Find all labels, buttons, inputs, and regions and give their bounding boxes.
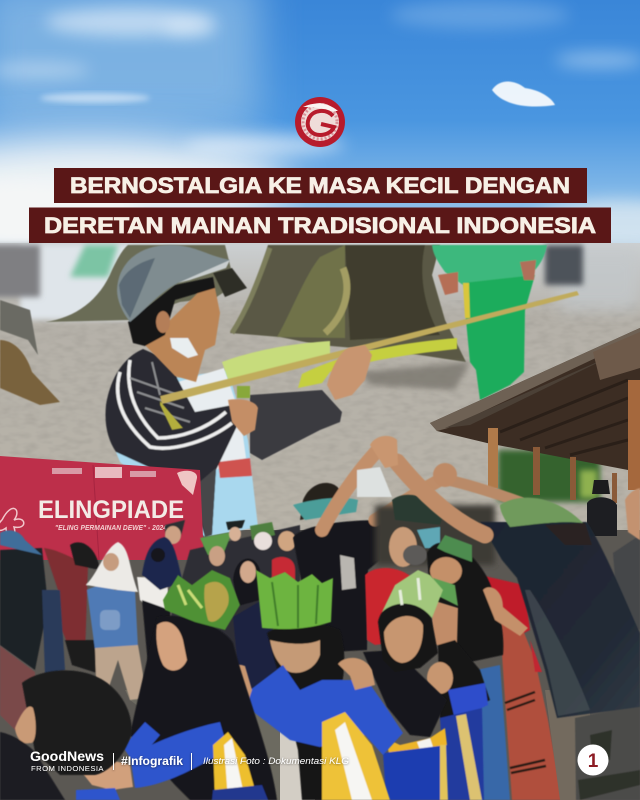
page number badge: 1 — [588, 751, 599, 772]
ground below crowd — [125, 690, 280, 800]
ground — [0, 243, 640, 800]
bamboo toy — [160, 291, 579, 430]
man with raised arms and emblem shirt — [293, 452, 520, 652]
blurred figures far behind — [0, 245, 583, 297]
event banner: Elingpiade — [0, 456, 204, 560]
footer: hashtag: #Infografik — [121, 756, 184, 768]
title bar: line two — [29, 208, 611, 243]
children behind in centre — [365, 495, 530, 645]
woman in red dress — [476, 623, 562, 800]
footer: photo credit: Ilustrasi Foto : Dokumentasi KLG — [203, 756, 349, 766]
child playing bamboo toy: head — [117, 245, 230, 382]
page number badge — [578, 744, 608, 776]
footer: GoodNews from Indonesia wordmark: FROM INDONESIA — [31, 764, 104, 773]
tall child with green crown behind — [427, 535, 528, 662]
child with bright leaf crown in centre — [222, 570, 403, 800]
tree roots — [45, 245, 470, 390]
event banner: Elingpiade: "ELING PERMAINAN DEWE" - 2024 — [55, 525, 167, 532]
stump at left — [0, 300, 60, 405]
child peeking beside smiling child — [427, 578, 490, 800]
man in black shirt reaching forward — [370, 436, 640, 800]
children in front left corner — [0, 670, 132, 800]
background sky photo — [0, 0, 640, 300]
title bar: line two: DERETAN MAINAN TRADISIONAL INDONESIA — [44, 213, 596, 238]
event banner: Elingpiade: ELINGPIADE — [38, 496, 184, 524]
footer: hashtag — [113, 753, 192, 770]
title bar: line one — [54, 168, 587, 203]
background crowd — [0, 520, 300, 735]
wooden hut — [430, 328, 640, 503]
footer: GoodNews from Indonesia wordmark: GoodNews — [30, 748, 104, 764]
title bar: line one: BERNOSTALGIA KE MASA KECIL DENGAN — [70, 173, 570, 198]
logo badge — [295, 97, 345, 147]
child with leaf crown on the left — [76, 570, 277, 800]
smiling child with leaf crown — [363, 570, 448, 800]
ground at lower right — [545, 690, 590, 800]
child playing bamboo toy: hands — [228, 345, 372, 436]
man standing under hut — [587, 480, 617, 536]
person in green costume — [432, 245, 547, 400]
child playing bamboo toy: torso — [105, 349, 342, 537]
footer: GoodNews from Indonesia wordmark — [30, 748, 104, 773]
